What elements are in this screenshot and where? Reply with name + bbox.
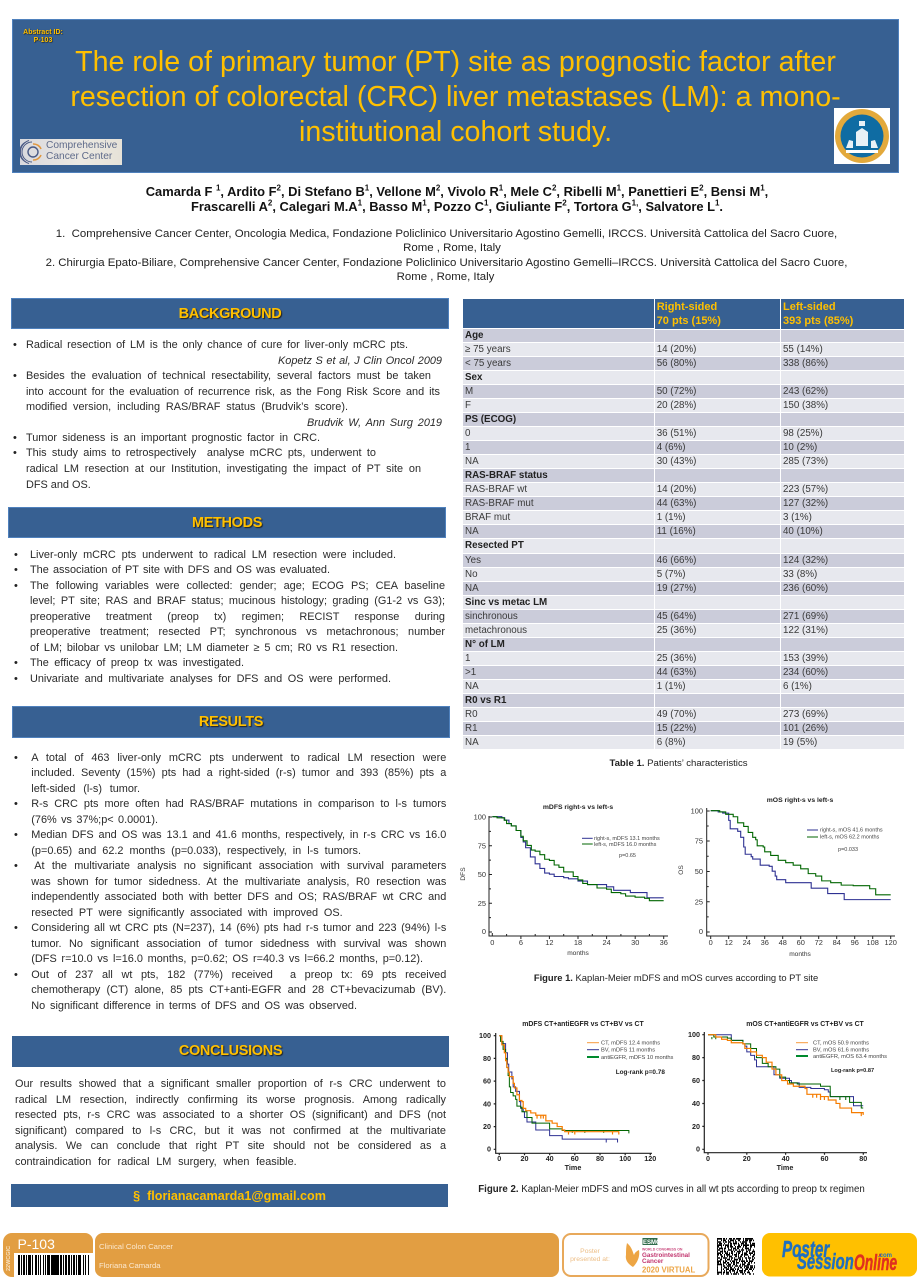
text: background: DFS and OS. <box>26 479 91 491</box>
chart: mDFS by preop regimen: 80 <box>483 1054 491 1063</box>
chart: mOS right-s vs left-s: 12 <box>725 938 733 947</box>
chart: mDFS by preop regimen: 60 <box>571 1154 579 1163</box>
table: patients' characteristics: RAS-BRAF status <box>465 470 548 481</box>
footer: session panel: Clinical Colon Cancer <box>99 1242 173 1251</box>
table: patients' characteristics: 6 (8%) <box>657 737 686 748</box>
chart: mOS by preop regimen: 20 <box>692 1122 700 1131</box>
chart: mDFS by preop regimen: antiEGFR, mDFS 10 months <box>601 1055 674 1061</box>
table: patients' characteristics: 19 (27%) <box>657 583 696 594</box>
footer: session panel: Floriana Camarda <box>99 1261 161 1270</box>
chart: mDFS right-s vs left-s: 24 <box>602 938 611 947</box>
table: patients' characteristics: BRAF mut <box>465 512 510 523</box>
chart: mOS right-s vs left-s: 60 <box>797 938 805 947</box>
text: results: independently associated both with better DFS and OS; RAS/BRAF wt CRC and <box>31 891 446 903</box>
table: patients' characteristics: 5 (7%) <box>657 569 686 580</box>
text: background: into account for the evaluation of recurrence risk, as the Fong Risk Score and its <box>26 386 440 398</box>
table: patients' characteristics: Sex <box>465 372 482 383</box>
caption: figure 2: Figure 2. Kaplan-Meier mDFS and mOS curves in all wt pts according to preop tx regimen <box>478 1184 865 1195</box>
affiliations <box>46 228 847 282</box>
text: results: • <box>14 860 18 872</box>
text: results: was shown for tumor sidedness. At the multivariate analysis, R0 resection was <box>31 876 446 888</box>
table: patients' characteristics: 19 (5%) <box>783 737 817 748</box>
text: methods: The association of PT site with DFS and OS was evaluated. <box>30 564 330 576</box>
table: patients' characteristics: RAS-BRAF wt <box>465 484 527 495</box>
chart: mOS right-s vs left-s: 84 <box>833 938 841 947</box>
chart: mDFS by preop regimen: 120 <box>644 1154 656 1163</box>
footer: presented at badge: Poster <box>580 1248 601 1255</box>
footer: postersessiononline logo: .com <box>878 1253 892 1259</box>
chart: mDFS by preop regimen: 40 <box>546 1154 554 1163</box>
contact email bar: § florianacamarda1@gmail.com <box>133 1189 326 1203</box>
table: patients' characteristics: 127 (32%) <box>783 498 828 509</box>
text: methods: level; PT site; RAS and BRAF status; mucinous histology; grading (G1-2 vs G3); <box>30 595 445 607</box>
chart: mOS by preop regimen: 80 <box>859 1154 867 1163</box>
table: patients' characteristics: 338 (86%) <box>783 358 828 369</box>
chart: mDFS by preop regimen: Log-rank p=0.78 <box>616 1069 665 1076</box>
text: results: (p=0.65) and 62.2 months (p=0.033), respectively, in l-s tumors. <box>31 845 361 857</box>
footer: postersessiononline logo <box>762 1233 917 1276</box>
text: methods: • <box>14 673 18 685</box>
text: results: Median DFS and OS was 13.1 and 41.6 months, respectively, in r-s CRC vs 16.0 <box>31 829 446 841</box>
chart: mDFS by preop regimen: 0 <box>487 1144 491 1154</box>
chart: mOS right-s vs left-s: 25 <box>695 898 703 906</box>
table: patients' characteristics: 285 (73%) <box>783 456 828 467</box>
table header: 393 pts (85%) <box>783 314 853 326</box>
footer: qr code <box>717 1238 755 1275</box>
table: patients' characteristics: 98 (25%) <box>783 428 823 439</box>
text: conclusions: analysis. We can conclude that right PT site should not be considered as a <box>15 1140 446 1152</box>
chart: mOS right-s vs left-s: p=0.033 <box>838 847 858 853</box>
table: patients' characteristics: 25 (36%) <box>657 625 696 636</box>
text: background: Radical resection of LM is the only chance of cure for liver-only mCRC pts. <box>26 339 408 351</box>
table: patients' characteristics: NA <box>465 526 479 537</box>
chart: mOS by preop regimen: 0 <box>706 1154 710 1163</box>
text: background: Tumor sideness is an important prognostic factor in CRC. <box>26 432 320 444</box>
table: patients' characteristics: NA <box>465 681 479 692</box>
chart: mDFS by preop regimen <box>479 1021 674 1172</box>
table: patients' characteristics: 44 (63%) <box>657 667 696 678</box>
icon: wheat leaf <box>626 1243 639 1267</box>
chart: mOS right-s vs left-s: left-s, mOS 62.2 months <box>820 834 880 840</box>
heading: background <box>11 298 449 329</box>
chart: mOS by preop regimen: CT, mOS 50.9 months <box>813 1040 869 1046</box>
chart: mDFS right-s vs left-s: 50 <box>478 870 486 879</box>
text: results: • <box>14 922 18 934</box>
table header <box>463 299 904 330</box>
chart: mDFS right-s vs left-s: 12 <box>545 938 554 947</box>
chart: mDFS right-s vs left-s: months <box>567 950 590 957</box>
footer: postersessiononline logo: Poster <box>782 1237 830 1263</box>
chart: mDFS right-s vs left-s: 6 <box>519 938 523 947</box>
affiliations: 2. Chirurgia Epato-Biliare, Comprehensive Cancer Center, Fondazione Policlinico Universitario Agostino Gemelli–IRCCS. Università Cattolica del Sacro Cuore, <box>46 256 847 268</box>
chart: mDFS right-s vs left-s: left-s, mDFS 16.0 months <box>594 842 657 848</box>
poster title: institutional cohort study. <box>299 116 612 148</box>
chart: mOS by preop regimen: Log-rank p=0.87 <box>831 1068 874 1074</box>
chart: mDFS by preop regimen: 80 <box>596 1154 604 1163</box>
chart: mDFS by preop regimen: 20 <box>520 1154 528 1163</box>
chart: mDFS by preop regimen: CT, mDFS 12.4 months <box>601 1040 660 1046</box>
chart: mDFS right-s vs left-s: 100 <box>474 812 486 822</box>
table: patients' characteristics: 223 (57%) <box>783 484 828 495</box>
text: background: modified version, including RAS/BRAF status (Brudvik’s score). <box>26 401 348 413</box>
table: patients' characteristics: 153 (39%) <box>783 653 828 664</box>
title banner <box>12 19 899 173</box>
chart: mDFS right-s vs left-s: 36 <box>660 938 668 947</box>
text: conclusions: resected pts, r-s CRC was associated to a shorter OS (significant) and DFS (not <box>15 1109 446 1121</box>
chart: mOS right-s vs left-s: 72 <box>815 938 823 947</box>
text: results: chemotherapy (CT) alone, 85 pts CT+anti-EGFR and 28 CT+bevacizumab (BV). <box>31 984 446 996</box>
chart: mOS by preop regimen: 100 <box>688 1030 700 1039</box>
authors: Camarda F 1, Ardito F2, Di Stefano B1, Vellone M2, Vivolo R1, Mele C2, Ribelli M1, Panettieri E2, Bensi M1, <box>146 184 768 199</box>
table: patients' characteristics: 124 (32%) <box>783 554 828 566</box>
text: results: A total of 463 liver-only mCRC pts underwent to radical LM resection were <box>31 752 446 764</box>
chart: mOS right-s vs left-s: 0 <box>709 938 713 947</box>
text: methods: • <box>14 549 18 561</box>
affiliations: Rome , Rome, Italy <box>397 270 494 282</box>
chart: mDFS by preop regimen: 20 <box>483 1122 491 1131</box>
text: conclusions: Our results showed that a significant smaller proportion of r-s CRC underwent to <box>15 1078 446 1090</box>
table: patients' characteristics: 11 (16%) <box>657 526 696 537</box>
chart: mOS by preop regimen: 0 <box>696 1144 700 1154</box>
table: patients' characteristics: 234 (60%) <box>783 667 828 678</box>
chart: mOS by preop regimen: 40 <box>782 1154 790 1163</box>
table: patients' characteristics: sinchronous <box>465 611 518 622</box>
text: results: tumor. No significant association of tumor sidedness with survival was shown <box>31 938 446 950</box>
authors <box>146 184 768 214</box>
table: patients' characteristics <box>463 299 904 749</box>
text: background: • <box>13 447 17 459</box>
table: patients' characteristics: 122 (31%) <box>783 625 828 636</box>
table: patients' characteristics: 15 (22%) <box>657 723 696 734</box>
text: results: R-s CRC pts more often had RAS/BRAF mutations in comparison to l-s tumors <box>31 798 446 810</box>
chart: mDFS by preop regimen: mDFS CT+antiEGFR vs CT+BV vs CT <box>522 1021 644 1028</box>
table: patients' characteristics: R0 vs R1 <box>465 695 506 706</box>
table: patients' characteristics: 46 (66%) <box>657 554 696 566</box>
footer: poster id tab <box>3 1233 93 1277</box>
footer: presented at badge: 2020 VIRTUAL <box>642 1266 696 1274</box>
chart: mOS by preop regimen: 60 <box>692 1076 700 1085</box>
table: patients' characteristics: NA <box>465 456 479 467</box>
footer: poster id tab: 22WCGIC <box>6 1246 12 1271</box>
table: patients' characteristics: 25 (36%) <box>657 653 696 664</box>
table: patients' characteristics: 20 (28%) <box>657 400 696 411</box>
poster title <box>70 46 841 148</box>
logo: university seal <box>834 108 890 164</box>
chart: mOS right-s vs left-s: 48 <box>779 938 787 947</box>
table: patients' characteristics: 236 (60%) <box>783 583 828 594</box>
table: patients' characteristics: 1 (1%) <box>657 512 686 523</box>
table: patients' characteristics: R1 <box>465 723 478 734</box>
table: patients' characteristics: N° of LM <box>465 639 505 650</box>
affiliations: 1. Comprehensive Cancer Center, Oncologia Medica, Fondazione Policlinico Universitario Agostino Gemelli, IRCCS. Università Cattolica del Sacro Cuore, <box>56 228 837 240</box>
chart: mDFS right-s vs left-s: p=0.65 <box>619 853 636 859</box>
chart: mOS by preop regimen: 60 <box>820 1154 828 1163</box>
text: results: (DFS r=10.0 vs l=16.0 months, p=0.62; OS r=40.3 vs l=66.2 months, p=0.12). <box>31 953 423 965</box>
text: background: Kopetz S et al, J Clin Oncol 2009 <box>278 355 442 367</box>
chart: mDFS right-s vs left-s <box>460 804 668 957</box>
table: patients' characteristics: 271 (69%) <box>783 611 828 622</box>
text: background: • <box>13 370 17 382</box>
heading: methods: METHODS <box>192 515 262 531</box>
chart: mDFS right-s vs left-s: 25 <box>478 899 486 908</box>
chart: mOS by preop regimen <box>688 1021 887 1172</box>
text: results: Out of 237 all wt pts, 182 (77%) received a preop tx: 69 pts received <box>31 969 446 981</box>
chart: mDFS by preop regimen: 40 <box>483 1100 491 1108</box>
table: patients' characteristics: Sinc vs metac LM <box>465 597 547 608</box>
table: patients' characteristics: M <box>465 386 473 397</box>
table: patients' characteristics: 150 (38%) <box>783 400 828 411</box>
table: patients' characteristics: < 75 years <box>465 358 511 369</box>
table: patients' characteristics: 243 (62%) <box>783 386 828 397</box>
text: results: No significant difference in terms of DFS and OS was observed. <box>31 1000 357 1012</box>
table: patients' characteristics: 49 (70%) <box>657 709 696 720</box>
table: patients' characteristics: ≥ 75 years <box>465 344 511 355</box>
table: patients' characteristics: 4 (6%) <box>657 442 686 453</box>
barcode <box>14 1253 93 1277</box>
text: results: Considering all wt CRC pts (N=237), 14 (6%) pts had r-s tumor and 223 (94%) l-s <box>31 922 446 934</box>
table: patients' characteristics: 45 (64%) <box>657 611 696 622</box>
abstract id: P-103 <box>34 37 52 44</box>
table: patients' characteristics: PS (ECOG) <box>465 414 516 425</box>
text: results <box>14 752 446 1012</box>
chart: mOS by preop regimen: BV, mOS 61.6 months <box>813 1048 869 1054</box>
table header: Right-sided <box>657 301 717 313</box>
abstract id <box>23 28 64 44</box>
chart: mOS right-s vs left-s <box>678 797 897 958</box>
chart: mOS by preop regimen: mOS CT+antiEGFR vs CT+BV vs CT <box>746 1021 865 1028</box>
table: patients' characteristics: 14 (20%) <box>657 344 696 355</box>
chart: mDFS right-s vs left-s: mDFS right-s vs left-s <box>543 804 613 811</box>
table: patients' characteristics: >1 <box>465 667 476 678</box>
logo: comprehensive cancer center: Comprehensive <box>46 140 117 151</box>
table: patients' characteristics: 0 <box>465 428 470 439</box>
poster title: The role of primary tumor (PT) site as prognostic factor after <box>75 46 836 78</box>
table: patients' characteristics: 6 (1%) <box>783 681 812 692</box>
chart: mOS right-s vs left-s: mOS right-s vs left-s <box>767 797 833 804</box>
chart: mDFS by preop regimen: 60 <box>483 1076 491 1086</box>
text: methods: The efficacy of preop tx was investigated. <box>30 657 244 669</box>
text: background: radical LM resection at our Institution, investigating the impact of PT site on <box>26 463 421 475</box>
text: methods: The following variables were collected: gender; age; ECOG PS; CEA baseline <box>30 580 445 592</box>
heading: conclusions <box>12 1036 449 1067</box>
text: methods: preoperative treatment; resected PT; synchronous vs metachronous; number <box>30 626 445 638</box>
table: patients' characteristics: Age <box>465 330 484 340</box>
chart: mOS right-s vs left-s: 50 <box>695 867 703 876</box>
table: patients' characteristics: 44 (63%) <box>657 498 696 509</box>
poster title: resection of colorectal (CRC) liver metastases (LM): a mono- <box>70 81 841 113</box>
table: patients' characteristics: 10 (2%) <box>783 442 817 453</box>
text: methods: • <box>14 564 18 576</box>
text: background: • <box>13 432 17 444</box>
table: patients' characteristics: 30 (43%) <box>657 456 696 467</box>
text: background: Besides the evaluation of technical resectability, several factors must be taken <box>26 370 431 382</box>
text: methods: • <box>14 657 18 669</box>
text: methods: • <box>14 580 18 592</box>
contact email bar <box>11 1184 448 1207</box>
chart: mDFS by preop regimen: BV, mDFS 11 months <box>601 1048 655 1054</box>
table: patients' characteristics: NA <box>465 737 479 748</box>
table header: Left-sided <box>783 301 836 313</box>
chart: mOS by preop regimen: 80 <box>692 1053 700 1062</box>
text: conclusions: radical LM resection, indirectly confirming its worse prognosis. Among radically <box>15 1094 446 1106</box>
chart: mOS by preop regimen: Time <box>777 1163 793 1172</box>
table: patients' characteristics: 1 (1%) <box>657 681 686 692</box>
heading: conclusions: CONCLUSIONS <box>179 1043 282 1059</box>
text: conclusions: contraindication for radical LM surgery, when feasible. <box>15 1156 297 1168</box>
footer: presented at badge: WORLD CONGRESS ON <box>642 1248 683 1252</box>
chart: mDFS right-s vs left-s: right-s, mDFS 13.1 months <box>594 836 660 842</box>
table: patients' characteristics: 1 <box>465 442 470 453</box>
footer: postersessiononline logo: Online <box>854 1250 897 1275</box>
heading: methods <box>8 507 446 538</box>
table: patients' characteristics: 3 (1%) <box>783 512 812 523</box>
text: results: • <box>14 798 18 810</box>
text: conclusions <box>15 1078 446 1168</box>
heading: results <box>12 706 450 738</box>
logo: comprehensive cancer center: Cancer Center <box>46 150 112 162</box>
text: background <box>13 339 442 491</box>
table: patients' characteristics: Yes <box>465 554 481 566</box>
table: patients' characteristics: 273 (69%) <box>783 709 828 720</box>
text: results: left-sided (l-s) tumor. <box>31 783 140 795</box>
chart: mDFS right-s vs left-s: 30 <box>631 938 639 947</box>
table: patients' characteristics: 14 (20%) <box>657 484 696 495</box>
text: background: Brudvik W, Ann Surg 2019 <box>307 417 442 429</box>
chart: mDFS by preop regimen: 0 <box>497 1154 501 1163</box>
footer: postersessiononline logo: Session <box>797 1249 854 1274</box>
footer: presented at badge <box>563 1234 708 1276</box>
text: methods: Univariate and multivariate analyses for DFS and OS were performed. <box>30 673 391 685</box>
table: patients' characteristics: Resected PT <box>465 540 524 551</box>
text: results: • <box>14 829 18 841</box>
chart: mOS right-s vs left-s: right-s, mOS 41.6 months <box>820 828 883 834</box>
chart: mOS right-s vs left-s: 75 <box>695 836 703 846</box>
text: results: • <box>14 752 18 764</box>
chart: mDFS right-s vs left-s: 0 <box>490 938 494 947</box>
chart: mOS right-s vs left-s: months <box>789 951 812 958</box>
chart: mOS right-s vs left-s: 36 <box>761 938 769 947</box>
footer: poster id tab: P-103 <box>18 1236 55 1252</box>
text: results: (76% vs 37%;p< 0.0001). <box>31 814 158 826</box>
table: patients' characteristics: 55 (14%) <box>783 344 823 355</box>
table: patients' characteristics: 50 (72%) <box>657 386 696 397</box>
affiliations: Rome , Rome, Italy <box>403 242 501 254</box>
text: methods: Liver-only mCRC pts underwent to radical LM resection were included. <box>30 549 396 561</box>
text: results: resected PT were significantly associated with improved OS. <box>31 907 343 919</box>
text: results: At the multivariate analysis no significant association with survival parameters <box>34 860 446 872</box>
chart: mOS by preop regimen: antiEGFR, mOS 63.4 months <box>813 1054 887 1060</box>
chart: mOS by preop regimen: 20 <box>743 1154 751 1163</box>
table: patients' characteristics: 101 (26%) <box>783 723 828 734</box>
footer: presented at badge: ESMO <box>643 1240 661 1246</box>
caption: figure 1: Figure 1. Kaplan-Meier mDFS and mOS curves according to PT site <box>534 972 818 983</box>
chart: mDFS by preop regimen: Time <box>565 1163 581 1172</box>
table header: 70 pts (15%) <box>657 314 721 326</box>
footer: presented at badge: Gastrointestinal <box>642 1252 690 1259</box>
chart: mOS right-s vs left-s: 108 <box>867 938 879 947</box>
chart: mOS right-s vs left-s: 120 <box>885 938 897 947</box>
chart: mOS by preop regimen: 40 <box>692 1099 700 1108</box>
chart: mDFS right-s vs left-s: DFS <box>460 867 467 881</box>
text: background: • <box>13 339 17 351</box>
text: methods: preoperative treatment (preop tx) regimen; RECIST response during <box>30 611 445 623</box>
caption: table 1: Table 1. Patients’ characteristics <box>609 758 748 769</box>
chart: mDFS right-s vs left-s: 75 <box>478 842 486 850</box>
heading: background: BACKGROUND <box>179 306 281 322</box>
authors: Frascarelli A2, Calegari M.A1, Basso M1, Pozzo C1, Giuliante F2, Tortora G1,, Salvatore L1. <box>191 199 723 214</box>
table: patients' characteristics: metachronous <box>465 625 527 636</box>
heading: results: RESULTS <box>199 714 263 730</box>
text: conclusions: significant) compared to l-s CRC, but it was not confirmed at the multivariate <box>15 1125 446 1137</box>
table: patients' characteristics: 40 (10%) <box>783 526 823 537</box>
table: patients' characteristics: NA <box>465 583 479 594</box>
text: methods <box>14 549 445 685</box>
footer: presented at badge: presented at: <box>570 1256 610 1263</box>
table: patients' characteristics: RAS-BRAF mut <box>465 498 534 509</box>
chart: mOS right-s vs left-s: OS <box>678 865 685 875</box>
abstract id: Abstract ID: <box>23 29 63 36</box>
chart: mOS right-s vs left-s: 0 <box>699 927 703 936</box>
table: patients' characteristics: 33 (8%) <box>783 569 817 580</box>
table: patients' characteristics: 36 (51%) <box>657 428 696 439</box>
chart: mDFS by preop regimen: 100 <box>619 1154 631 1163</box>
table: patients' characteristics: No <box>465 569 478 580</box>
chart: mDFS by preop regimen: 100 <box>479 1031 491 1040</box>
table: patients' characteristics: 56 (80%) <box>657 358 696 369</box>
text: methods: of LM; bilobar vs unilobar LM; LM diameter ≥ 5 cm; R0 vs R1 resection. <box>30 642 398 654</box>
chart: mOS right-s vs left-s: 24 <box>743 938 751 947</box>
chart: mOS right-s vs left-s: 96 <box>851 938 859 947</box>
table: patients' characteristics: F <box>465 400 471 411</box>
chart: mOS right-s vs left-s: 100 <box>691 806 703 816</box>
chart: mDFS right-s vs left-s: 0 <box>482 927 486 936</box>
text: results: • <box>14 969 18 981</box>
footer: session panel <box>95 1233 559 1277</box>
text: results: included. Seventy (15%) pts had a right-sided (r-s) tumor and 393 (85%) pts a <box>31 767 446 779</box>
footer: presented at badge: Cancer <box>642 1258 664 1265</box>
text: background: This study aims to retrospectively analyse mCRC pts, underwent to <box>26 447 376 459</box>
table: patients' characteristics: 1 <box>465 653 470 664</box>
logo: comprehensive cancer center <box>20 139 122 165</box>
chart: mDFS right-s vs left-s: 18 <box>574 938 582 947</box>
table: patients' characteristics: R0 <box>465 709 478 720</box>
